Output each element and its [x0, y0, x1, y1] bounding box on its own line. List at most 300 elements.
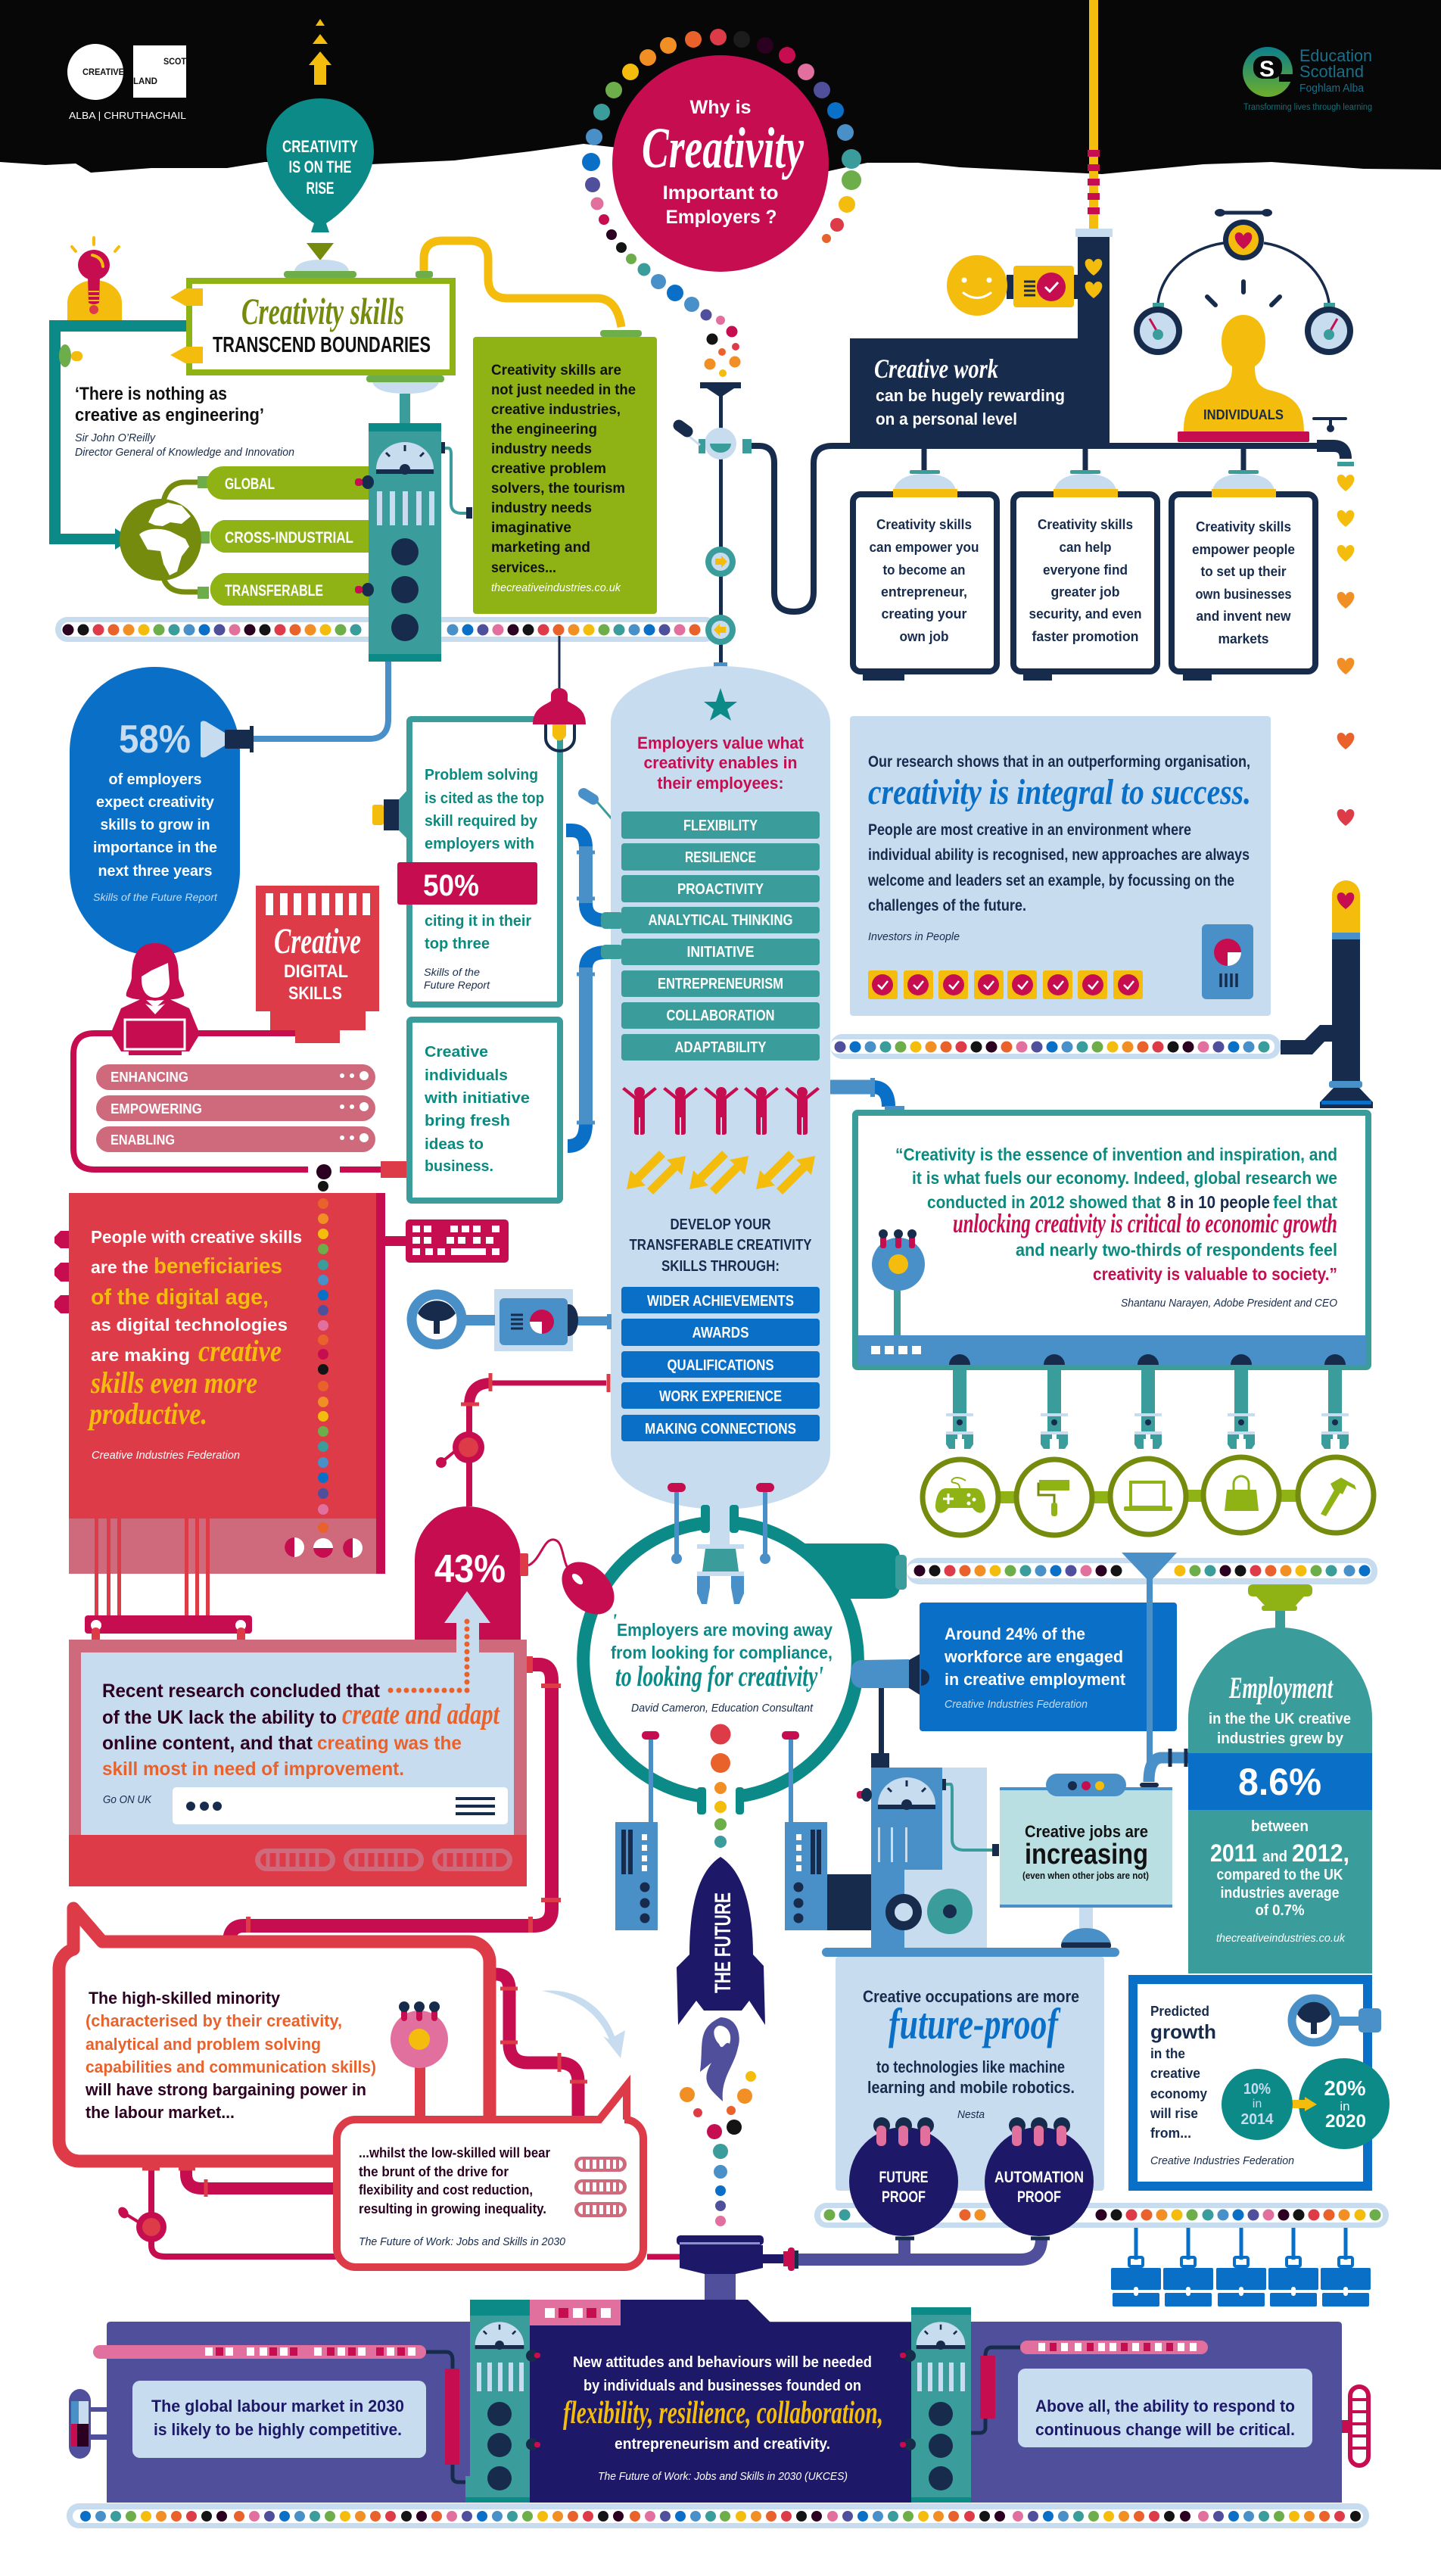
- dark central panel with base: flexibility, resilience, collaboration,: [563, 2396, 883, 2431]
- rocket: the future: THE FUTURE: [711, 1892, 736, 1993]
- globe connectors and pills: GLOBAL: [225, 475, 275, 493]
- dark central panel with base: entrepreneurism and creativity.: [615, 2436, 830, 2453]
- blue capsule: 58 percent: 58%: [119, 718, 191, 762]
- box: empower entrepreneur: own job: [899, 628, 949, 644]
- panel: creativity integral to success: [850, 716, 1271, 1016]
- tank content: develop skills: MAKING CONNECTIONS: [645, 1421, 796, 1438]
- icon: laptop: [1124, 1482, 1172, 1511]
- box: set up own businesses: markets: [1218, 631, 1268, 646]
- speech bubble: low-skilled: The Future of Work: Jobs and Skills in 2030: [359, 2236, 565, 2248]
- ball: automation proof: [985, 2117, 1094, 2236]
- server box right: [785, 1822, 871, 1930]
- icon: creative digital skills chip: DIGITAL: [284, 961, 348, 982]
- title circle: Employers ?: [666, 207, 777, 228]
- yellow pipe: [424, 241, 621, 327]
- funnel and pipe to employment tank: [1122, 1553, 1188, 1787]
- tank content: employers value: COLLABORATION: [666, 1008, 775, 1024]
- box: predicted growth: 2020: [1325, 2111, 1366, 2132]
- icon: individuals bust with gauges: [1134, 209, 1353, 442]
- box: greater job security: everyone find: [1043, 562, 1128, 578]
- handle knob: [584, 793, 593, 799]
- teal box: problem solving 50 percent: Skills of the: [424, 966, 480, 978]
- box: predicted growth: 2014: [1241, 2111, 1274, 2128]
- blue capsule: 58 percent: of employers: [109, 771, 201, 788]
- title circle: Why is: [690, 97, 751, 118]
- red panel: beneficiaries of the digital age: of the digital age,: [91, 1285, 269, 1310]
- screen: creative jobs increasing: increasing: [1025, 1839, 1148, 1870]
- conveyor belt: to right column: [830, 1034, 1281, 1059]
- tank content: employers value: creativity enables in: [643, 753, 798, 772]
- icon: pink pin ball: [391, 2001, 448, 2117]
- quote: employers moving away: David Cameron, Education Consultant: [631, 1702, 814, 1715]
- pills: enhancing empowering enabling: ENABLING: [110, 1132, 175, 1148]
- ball: future proof: FUTURE: [879, 2169, 928, 2186]
- blue capsule: 58 percent: [70, 667, 254, 955]
- blue capsule: 58 percent: expect creativity: [96, 794, 215, 811]
- logo: Education Scotland: Scotland: [1299, 62, 1364, 81]
- box: empower entrepreneur: Creativity skills: [876, 516, 972, 532]
- dark central panel with base: The Future of Work: Jobs and Skills in 2030 (UKCES): [598, 2470, 848, 2483]
- screen panel: 43 percent lack ability: [69, 1591, 527, 1886]
- green panel: creativity skills not just creative industries: imaginative: [491, 519, 571, 536]
- icon: individuals bust with gauges: INDIVIDUALS: [1203, 407, 1284, 422]
- yellow rod with crimson rings: [1075, 0, 1113, 237]
- blue pipe from machine to capsule: [254, 662, 388, 739]
- icon: computer mouse: [520, 1540, 624, 1624]
- navy panel: creative work rewarding: Creative work: [874, 354, 998, 384]
- teal box: creative individuals initiative: Creative: [425, 1044, 488, 1061]
- teal box: problem solving 50 percent: [372, 719, 560, 1005]
- red panel: beneficiaries of the digital age: People with creative skills: [91, 1227, 302, 1247]
- dome: 43 percent: 43%: [434, 1547, 506, 1591]
- box: set up own businesses: and invent new: [1196, 608, 1291, 624]
- speech bubble: high-skilled minority: (characterised by their creativity,: [86, 2011, 342, 2030]
- green panel: creativity skills not just creative industries: industry needs: [491, 441, 592, 457]
- crimson hanger bar: [85, 1615, 252, 1647]
- globe connectors and pills: TRANSFERABLE: [225, 582, 323, 600]
- yellow double arrows: [627, 1151, 815, 1195]
- blue pipes to tank: [566, 830, 606, 1146]
- icon: smiley with checkbox: [947, 255, 1078, 316]
- teal box: creative individuals initiative: [409, 1020, 560, 1201]
- pills: enhancing empowering enabling: ENHANCING: [110, 1070, 188, 1085]
- screen: creative jobs increasing: (even when other jobs are not): [1022, 1870, 1149, 1881]
- panel: future-proof: to technologies like machine: [876, 2057, 1065, 2076]
- tank content: employers value: [621, 688, 820, 1061]
- logo: Education Scotland: Foghlam Alba: [1299, 82, 1365, 95]
- box: predicted growth: in the: [1150, 2046, 1185, 2061]
- box: set up own businesses: empower people: [1192, 541, 1295, 557]
- box: set up own businesses: Creativity skills: [1196, 519, 1291, 534]
- red panel: beneficiaries of the digital age: creative: [198, 1334, 282, 1368]
- logo: Creative Scotland: [67, 44, 186, 121]
- screen panel: 43 percent lack ability: Recent research concluded that: [102, 1680, 381, 1702]
- red panel: beneficiaries of the digital age: skills even more: [90, 1366, 257, 1400]
- title circle: [612, 55, 829, 272]
- purple pipe to proof balls: [795, 2238, 1050, 2260]
- box: predicted growth: Creative Industries Federation: [1150, 2155, 1294, 2167]
- speech bubble: high-skilled minority: [59, 1908, 490, 2161]
- teal box: problem solving 50 percent: top three: [425, 936, 490, 952]
- quote box: adobe: Shantanu Narayen, Adobe President and CEO: [1121, 1297, 1337, 1310]
- green panel: creativity skills not just creative industries: not just needed in the: [491, 382, 636, 398]
- quote: employers moving away: ': [612, 1610, 617, 1632]
- callout: ability to respond to change: [1018, 2369, 1312, 2447]
- blue panel: 24 percent workforce: in creative employment: [945, 1670, 1126, 1689]
- box: predicted growth: [1133, 1980, 1390, 2186]
- balloon: creativity is on the rise: [266, 98, 374, 232]
- crimson frame: digital skills loop: [73, 1033, 382, 1170]
- icon: shopping bag: [1225, 1476, 1259, 1511]
- box: set up own businesses: to set up their: [1200, 563, 1287, 579]
- tank content: develop skills: SKILLS THROUGH:: [661, 1258, 780, 1275]
- box: greater job security: Creativity skills: [1038, 516, 1133, 532]
- screen: creative jobs increasing: Creative jobs are: [1025, 1822, 1148, 1841]
- blue panel: 24 percent workforce: [920, 1603, 1177, 1731]
- employment tank: [1188, 1584, 1372, 1973]
- quote: nothing as creative as engineering: Sir John O’Reilly: [75, 432, 156, 444]
- speech bubble: low-skilled: the brunt of the drive for: [359, 2163, 509, 2179]
- box: predicted growth: creative: [1150, 2066, 1200, 2081]
- speech bubble: high-skilled minority: capabilities and communication skills): [86, 2057, 376, 2076]
- green panel: creativity skills not just creative industries: creative problem: [491, 460, 606, 477]
- green panel: creativity skills not just creative industries: thecreativeindustries.co.uk: [491, 582, 621, 594]
- hanger threads: [95, 1519, 210, 1617]
- red panel: beneficiaries of the digital age: as digital technologies: [91, 1315, 288, 1335]
- box: predicted growth: 20%: [1324, 2076, 1366, 2100]
- teal box: problem solving 50 percent: citing it in their: [425, 913, 531, 930]
- navy panel: creative work rewarding: on a personal level: [876, 410, 1017, 428]
- quote: nothing as creative as engineering: Director General of Knowledge and Innovation: [75, 447, 294, 459]
- tall navy column with heart: [1281, 880, 1373, 1108]
- lightbulb icon: [67, 238, 122, 320]
- icon: creative digital skills chip: [256, 886, 379, 1043]
- employment tank: 8.6%: [1238, 1761, 1321, 1803]
- briefcase row: [1111, 2228, 1371, 2307]
- pins on ring: [642, 1483, 799, 1823]
- employment tank: in the the UK creative: [1209, 1711, 1351, 1727]
- quote box: adobe: it is what fuels our economy. Indeed, global research we: [912, 1168, 1337, 1188]
- employment tank: of 0.7%: [1255, 1902, 1305, 1919]
- stem from box to machine: [400, 394, 410, 423]
- tank content: develop skills: WORK EXPERIENCE: [659, 1388, 782, 1405]
- navy panel: creative work rewarding: [850, 237, 1110, 444]
- blue machine with gauge: [857, 1688, 999, 1948]
- title circle: Creativity: [642, 117, 804, 180]
- icon: megaphone: [851, 1653, 921, 1696]
- screen panel: 43 percent lack ability: skill most in need of improvement.: [102, 1758, 404, 1780]
- ball: automation proof: AUTOMATION: [994, 2169, 1084, 2186]
- box: predicted growth: will rise: [1150, 2106, 1198, 2121]
- yellow up arrows: [309, 19, 331, 85]
- balloon: creativity is on the rise: RISE: [306, 179, 335, 198]
- employment tank: thecreativeindustries.co.uk: [1216, 1933, 1346, 1945]
- bracket arrow from skills box to globe: [49, 316, 201, 550]
- quote: nothing as creative as engineering: ‘There is nothing as: [75, 384, 227, 404]
- quote: employers moving away: to looking for creativity': [615, 1661, 823, 1693]
- quote: employers moving away: Employers are moving away: [617, 1620, 833, 1640]
- green panel: creativity skills not just creative industries: Creativity skills are: [491, 362, 621, 378]
- dome: 43 percent: [415, 1506, 521, 1643]
- tank content: employers value: Employers value what: [637, 734, 805, 752]
- employment tank: compared to the UK: [1217, 1867, 1343, 1883]
- icon: gamepad: [935, 1478, 985, 1513]
- screen: creative jobs increasing: [1000, 1774, 1172, 1948]
- icon: hanging lamp: [533, 688, 586, 751]
- falling hearts: [1337, 475, 1354, 826]
- crimson pipe tank to 43 percent dome: [461, 1373, 608, 1506]
- quote box: adobe: conducted in 2012 showed that: [927, 1192, 1161, 1212]
- employment tank: industries grew by: [1217, 1730, 1344, 1747]
- rocket flame and exhaust dots: [680, 2017, 756, 2226]
- quote box: adobe: [855, 1113, 1368, 1367]
- globe connectors and pills: [163, 466, 371, 606]
- box: creativity skills transcend boundaries: TRANSCEND BOUNDARIES: [213, 333, 431, 357]
- dark central panel with base: by individuals and businesses founded on: [584, 2378, 861, 2394]
- valve on pipe: [436, 1431, 484, 1468]
- box: empower entrepreneur: to become an: [882, 562, 966, 578]
- speech bubble: high-skilled minority: the labour market...: [86, 2103, 235, 2122]
- icon: keyboard: [385, 1219, 509, 1263]
- machine bottom right: [900, 2307, 971, 2503]
- tank content: develop skills: TRANSFERABLE CREATIVITY: [630, 1237, 812, 1254]
- blue capsule: 58 percent: skills to grow in: [100, 817, 210, 833]
- panel: future-proof: Nesta: [957, 2109, 985, 2121]
- tank content: employers value: INITIATIVE: [687, 944, 754, 961]
- icon: hammer: [1321, 1478, 1356, 1516]
- logo: Education Scotland: Transforming lives through learning: [1243, 103, 1372, 112]
- curved light blue arrow: [542, 1990, 625, 2058]
- panel: creativity integral to success: Our research shows that in an outperforming organisation,: [868, 753, 1250, 771]
- rocket: the future: [677, 1857, 765, 2025]
- teal box: problem solving 50 percent: Problem solving: [425, 767, 538, 783]
- green panel: creativity skills not just creative industries: [473, 330, 657, 614]
- teal box: creative individuals initiative: with initiative: [424, 1090, 530, 1107]
- box: greater job security: can help: [1060, 539, 1111, 555]
- vertical dot chain: [316, 1164, 331, 1533]
- tank handle: [584, 793, 615, 822]
- red panel: beneficiaries of the digital age: productive.: [87, 1397, 207, 1431]
- wire to green box: [445, 448, 468, 513]
- red panel: beneficiaries of the digital age: are making: [91, 1345, 190, 1365]
- conveyor belt: mid right: [907, 1558, 1377, 1584]
- employment tank: between: [1251, 1818, 1309, 1835]
- callout: global labour market: [132, 2381, 426, 2458]
- dots between ring and rocket: [710, 1724, 731, 1848]
- tank content: employers value: ENTREPRENEURISM: [658, 976, 783, 992]
- red panel: beneficiaries of the digital age: [54, 1193, 385, 1574]
- tank content: develop skills: WIDER ACHIEVEMENTS: [647, 1293, 794, 1310]
- quote: employers moving away: from looking for compliance,: [611, 1643, 833, 1662]
- central tank: [611, 666, 830, 1509]
- dark central panel with base: New attitudes and behaviours will be needed: [573, 2354, 872, 2371]
- box: predicted growth: in: [1340, 2099, 1350, 2113]
- logo: Creative Scotland: CREATIVE: [82, 68, 124, 77]
- robot claws: [946, 1354, 1349, 1449]
- teal box: creative individuals initiative: bring fresh: [425, 1113, 510, 1129]
- green panel: creativity skills not just creative industries: solvers, the tourism: [491, 480, 625, 497]
- logo: Creative Scotland: SCOT: [163, 58, 186, 67]
- blue capsule: 58 percent: Skills of the Future Report: [93, 891, 218, 903]
- tank content: employers value: PROACTIVITY: [677, 881, 764, 898]
- screen panel: 43 percent lack ability: creating was the: [317, 1733, 462, 1754]
- icon: creative digital skills chip: Creative: [274, 921, 361, 961]
- blue pipe tank to quote box: [830, 1078, 904, 1110]
- logo: Education Scotland: S: [1259, 57, 1274, 82]
- icon: lens and pie chart device: [412, 1289, 612, 1351]
- box: predicted growth: from...: [1150, 2126, 1191, 2141]
- thick crimson pipe from screen: [229, 1656, 561, 1942]
- panel: future-proof: Creative occupations are more: [863, 1987, 1079, 2006]
- blue panel: 24 percent workforce: workforce are engaged: [944, 1647, 1123, 1666]
- speech bubble: low-skilled: flexibility and cost reduction,: [359, 2182, 533, 2198]
- tank content: develop skills: QUALIFICATIONS: [668, 1357, 773, 1374]
- screen panel: 43 percent lack ability: create and adapt: [342, 1699, 500, 1730]
- tank content: employers value: RESILIENCE: [685, 849, 756, 866]
- quote: employers moving away: [611, 1610, 833, 1715]
- panel: creativity integral to success: challenges of the future.: [868, 897, 1026, 914]
- blue capsule: 58 percent: next three years: [98, 863, 212, 880]
- balloon: creativity is on the rise: CREATIVITY: [282, 137, 358, 156]
- lamp cord: [559, 636, 560, 690]
- bottom purple panel: [107, 2322, 1342, 2503]
- panel: future-proof: learning and mobile robotics.: [867, 2078, 1075, 2097]
- employment tank: and: [1262, 1849, 1287, 1865]
- logo: Education Scotland: [1243, 46, 1372, 112]
- icon: creative digital skills chip: SKILLS: [288, 983, 342, 1004]
- red panel: beneficiaries of the digital age: beneficiaries: [154, 1254, 282, 1279]
- speech bubble: low-skilled: resulting in growing inequality.: [359, 2201, 546, 2216]
- balloon: creativity is on the rise: IS ON THE: [289, 157, 351, 176]
- tank content: employers value: FLEXIBILITY: [683, 818, 758, 834]
- icon: globe: [120, 499, 201, 581]
- logo: Education Scotland: Education: [1299, 46, 1372, 65]
- dark central panel with base: [530, 2235, 911, 2503]
- central pipe with valves: [679, 382, 752, 667]
- callout: ability to respond to change: continuous change will be critical.: [1035, 2420, 1295, 2439]
- crimson pipes between bubbles: [142, 1974, 681, 2257]
- teal box: creative individuals initiative: ideas to: [425, 1136, 484, 1153]
- ring with teal pipe: [584, 1505, 907, 1814]
- employment tank: 2011: [1210, 1839, 1257, 1867]
- ball: automation proof: PROOF: [1017, 2188, 1061, 2206]
- blue panel: 24 percent workforce: Around 24% of the: [945, 1624, 1085, 1643]
- panel: creativity integral to success: People are most creative in an environment where: [868, 821, 1191, 839]
- speech bubble: high-skilled minority: The high-skilled minority: [89, 1989, 281, 2008]
- conveyor belt with dots: top left: [55, 617, 717, 642]
- callout: ability to respond to change: Above all, the ability to respond to: [1035, 2397, 1295, 2416]
- blue panel: 24 percent workforce: Creative Industries Federation: [945, 1699, 1088, 1711]
- screen panel: 43 percent lack ability: Go ON UK: [103, 1793, 152, 1806]
- panel: creativity integral to success: welcome and leaders set an example, by focussing on the: [867, 872, 1234, 889]
- green panel: creativity skills not just creative industries: the engineering: [491, 421, 597, 438]
- pills: enhancing empowering enabling: EMPOWERING: [110, 1101, 202, 1117]
- navy panel: creative work rewarding: can be hugely rewarding: [876, 386, 1065, 405]
- tank content: develop skills: [621, 1216, 820, 1441]
- pink indicator strip left: [93, 2345, 465, 2482]
- pills: enhancing empowering enabling: [96, 1064, 375, 1152]
- crimson ladder handle: [1342, 2387, 1368, 2465]
- employment tank: Employment: [1228, 1671, 1334, 1705]
- quote box: adobe: feel that: [1273, 1192, 1337, 1212]
- teal box: creative individuals initiative: business.: [425, 1158, 493, 1175]
- teal box: creative individuals initiative: individuals: [425, 1067, 508, 1084]
- panel: creativity integral to success: Investors in People: [868, 931, 960, 943]
- speech bubble: low-skilled: [337, 2085, 643, 2267]
- box: empower entrepreneur: [853, 470, 997, 681]
- test tube left: [69, 2389, 107, 2459]
- quote box: adobe: creativity is valuable to society.”: [1093, 1264, 1337, 1284]
- ball: future proof: [849, 2117, 958, 2236]
- globe connectors and pills: CROSS-INDUSTRIAL: [225, 529, 353, 547]
- callout: global labour market: The global labour market in 2030: [151, 2397, 404, 2416]
- box: greater job security: [1013, 470, 1157, 681]
- icon: blue pin ball: [872, 1229, 925, 1335]
- box: predicted growth: in: [1253, 2098, 1262, 2110]
- navy pipe and faucet: [752, 419, 1354, 612]
- box: creativity skills transcend boundaries: [170, 243, 453, 394]
- teal box: problem solving 50 percent: is cited as the top: [425, 790, 544, 807]
- conveyor belt: lower right: [814, 2203, 1389, 2228]
- employment tank: 2012,: [1292, 1839, 1349, 1867]
- row of people icons: [622, 1087, 820, 1135]
- callout: global labour market: is likely to be highly competitive.: [154, 2420, 402, 2439]
- green panel: creativity skills not just creative industries: creative industries,: [491, 401, 621, 418]
- rainbow dots arc: [582, 29, 861, 377]
- box: predicted growth: 10%: [1243, 2081, 1271, 2098]
- green panel: creativity skills not just creative industries: services...: [491, 559, 556, 576]
- box: set up own businesses: own businesses: [1196, 586, 1291, 602]
- box: set up own businesses: [1172, 470, 1315, 681]
- box: creativity skills transcend boundaries: Creativity skills: [241, 290, 404, 332]
- tank outlet with claw: [697, 1503, 744, 1604]
- tank content: employers value: their employees:: [657, 774, 784, 793]
- quote: nothing as creative as engineering: creative as engineering’: [75, 405, 264, 425]
- box: empower entrepreneur: entrepreneur,: [881, 584, 967, 600]
- box: greater job security: greater job: [1050, 584, 1120, 600]
- teal box: problem solving 50 percent: 50%: [423, 869, 479, 902]
- teal pipe connectors: [601, 912, 624, 959]
- speech bubble: low-skilled: ...whilst the low-skilled will bear: [359, 2145, 550, 2160]
- quote box: adobe: “Creativity is the essence of invention and inspiration, and: [895, 1145, 1337, 1164]
- title circle: Important to: [663, 182, 778, 204]
- pink indicator strip right: [971, 2341, 1208, 2433]
- teal box: problem solving 50 percent: skill required by: [425, 813, 538, 830]
- panel: creativity integral to success: individual ability is recognised, new approaches are always: [868, 846, 1250, 864]
- logo: Creative Scotland: LAND: [133, 77, 157, 86]
- box: empower entrepreneur: creating your: [881, 606, 967, 621]
- panel: creativity integral to success: creativity is integral to success.: [868, 772, 1251, 812]
- screen panel: 43 percent lack ability: online content, and that: [102, 1733, 313, 1754]
- conveyor belt: bottom: [67, 2503, 1369, 2528]
- icons chain: creative sectors: [923, 1457, 1374, 1535]
- red stub: [381, 1161, 406, 1178]
- red panel: beneficiaries of the digital age: Creative Industries Federation: [92, 1450, 240, 1462]
- box: empower entrepreneur: can empower you: [869, 539, 979, 555]
- quote box: adobe: and nearly two-thirds of respondents feel: [1016, 1240, 1337, 1260]
- server box left: [615, 1822, 658, 1930]
- tank content: develop skills: AWARDS: [692, 1325, 749, 1341]
- box: predicted growth: Predicted: [1150, 2004, 1209, 2019]
- blue capsule: 58 percent: importance in the: [93, 839, 217, 856]
- box: greater job security: faster promotion: [1032, 628, 1138, 644]
- machine bottom left: [465, 2300, 540, 2503]
- box: greater job security: security, and even: [1029, 606, 1141, 621]
- tank content: employers value: ADAPTABILITY: [675, 1039, 767, 1056]
- teal box: problem solving 50 percent: Future Report: [424, 979, 490, 991]
- quote box: adobe: 8 in 10 people: [1167, 1192, 1270, 1212]
- green panel: creativity skills not just creative industries: industry needs: [491, 500, 592, 516]
